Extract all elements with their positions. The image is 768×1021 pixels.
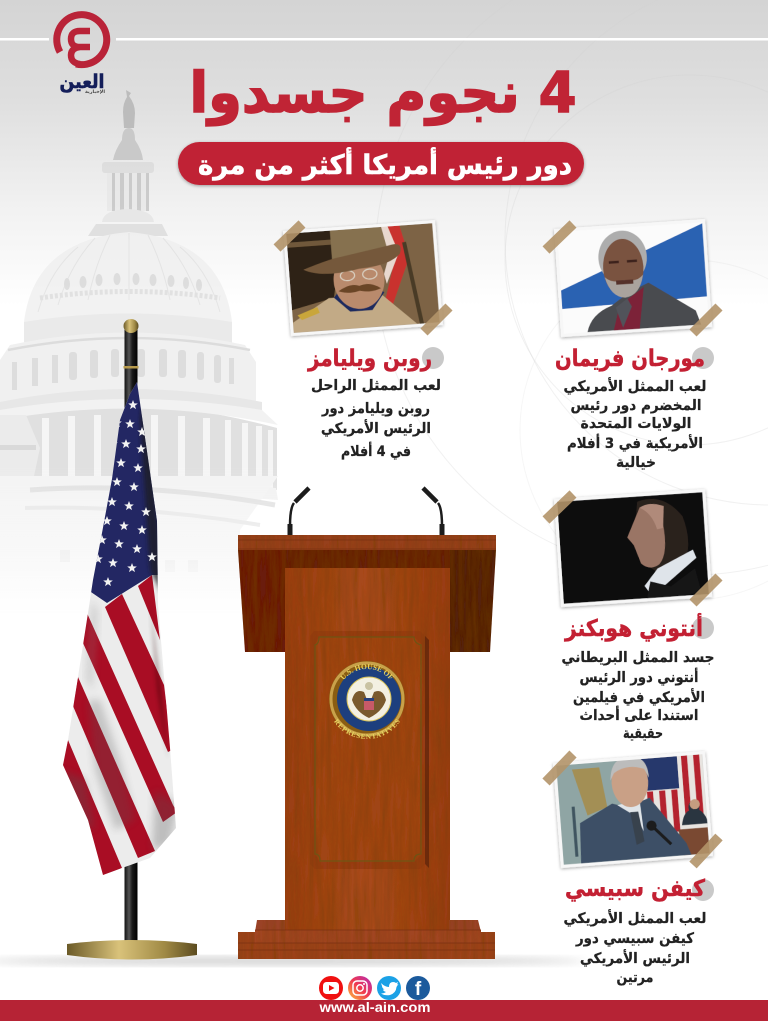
flag on pole xyxy=(62,319,197,960)
logo: Al-Ain: العين xyxy=(60,71,104,93)
description: Kevin Spacey: لعب الممثل الأمريكي xyxy=(564,909,706,927)
description: Anthony Hopkins: الأمريكي في فيلمين xyxy=(573,688,705,706)
description: Robin Williams xyxy=(311,378,441,460)
floor shadow xyxy=(0,957,585,965)
photo: Robin Williams xyxy=(283,220,443,336)
description: Anthony Hopkins: أنتوني دور الرئيس xyxy=(580,668,698,686)
footer bar: www.al-ain.com xyxy=(318,1000,430,1015)
podium seal: U.S. HOUSE OF xyxy=(340,664,394,680)
photo: Kevin Spacey xyxy=(553,751,713,868)
social icons xyxy=(319,976,430,1000)
podium xyxy=(238,535,496,959)
icon: youtube xyxy=(319,976,343,1000)
description: Morgan Freeman: المخضرم دور رئيس xyxy=(570,398,702,414)
description: Morgan Freeman: خيالية xyxy=(616,455,656,471)
tape xyxy=(546,754,719,865)
flag pole xyxy=(124,319,138,946)
description: Robin Williams: في 4 أفلام xyxy=(341,442,411,460)
podium wood body xyxy=(238,535,496,959)
icon: facebook: f xyxy=(415,979,422,1000)
tape xyxy=(546,494,719,603)
name: Robin Williams: روبن ويليامز xyxy=(307,346,432,372)
description: Robin Williams: الرئيس الأمريكي xyxy=(321,419,431,437)
description: Kevin Spacey xyxy=(564,909,706,986)
card: Kevin Spacey xyxy=(546,751,719,986)
subtitle pill: دور رئيس أمريكا أكثر من مرة xyxy=(198,147,572,181)
description: Robin Williams: روبن ويليامز دور xyxy=(321,401,430,417)
podium seal xyxy=(329,661,405,739)
description: Morgan Freeman xyxy=(564,377,706,471)
logo: Al-Ain xyxy=(57,15,107,95)
card: Morgan Freeman xyxy=(546,219,719,471)
description: Morgan Freeman: الأمريكية في 3 أفلام xyxy=(567,434,703,452)
icon: instagram xyxy=(348,976,372,1000)
description: Robin Williams: لعب الممثل الراحل xyxy=(311,378,441,394)
subtitle pill xyxy=(178,142,584,185)
photo: Morgan Freeman xyxy=(554,219,712,337)
description: Kevin Spacey: مرتين xyxy=(616,970,654,986)
tape xyxy=(546,224,719,333)
tape xyxy=(277,224,449,332)
description: Anthony Hopkins: جسد الممثل البريطاني xyxy=(562,650,714,666)
description: Anthony Hopkins: حقيقية xyxy=(623,726,663,742)
card: Robin Williams xyxy=(277,220,449,460)
description: Kevin Spacey: كيفن سبيسي دور xyxy=(575,931,695,947)
title: 4 نجوم جسدوا xyxy=(190,61,576,126)
card: Anthony Hopkins xyxy=(546,489,719,742)
name: Kevin Spacey: كيفن سبيسي xyxy=(565,876,706,902)
footer bar xyxy=(0,1000,768,1021)
description: Anthony Hopkins: استندا على أحداث xyxy=(580,706,698,724)
photo: Anthony Hopkins xyxy=(554,489,712,607)
podium seal: REPRESENTATIVES xyxy=(334,718,400,739)
description: Morgan Freeman: لعب الممثل الأمريكي xyxy=(564,377,706,395)
description: Morgan Freeman: الولايات المتحدة xyxy=(580,416,692,432)
description: Kevin Spacey: الرئيس الأمريكي xyxy=(580,949,690,967)
name: Morgan Freeman: مورجان فريمان xyxy=(555,346,705,372)
flag base xyxy=(67,940,197,960)
flag cloth xyxy=(62,370,178,876)
capitol building backdrop xyxy=(0,90,278,616)
microphones xyxy=(290,488,442,535)
icon: twitter xyxy=(377,976,401,1000)
description: Anthony Hopkins xyxy=(562,650,714,742)
logo: Al-Ain: الإخبارية xyxy=(85,90,105,95)
name: Anthony Hopkins: أنتوني هوبكنز xyxy=(564,612,703,642)
